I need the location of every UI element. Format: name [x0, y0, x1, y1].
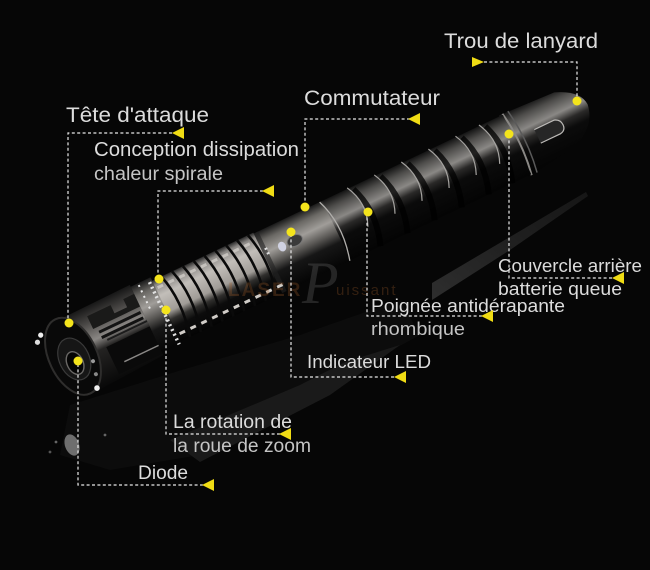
- callout: Indicateur LED: [286, 228, 431, 383]
- callout: Poignée antidérapante rhombique: Poignée antidérapante: [371, 296, 565, 316]
- callout: Indicateur LED: Indicateur LED: [307, 352, 431, 372]
- callout: Commutateur: Commutateur: [304, 87, 440, 110]
- callout: Conception dissipation chaleur spirale: [94, 139, 299, 284]
- callout: Couvercle arrière batterie queue: [498, 130, 642, 299]
- watermark: uissant: [336, 282, 398, 299]
- zoom wheel: [131, 277, 182, 353]
- reflection of the laser: [49, 192, 588, 470]
- callout: Commutateur: [300, 87, 440, 212]
- rhombic anti-slip grip: [319, 114, 531, 262]
- watermark: P: [301, 250, 339, 316]
- callout: Diode: Diode: [138, 463, 188, 484]
- callout: Diode: [74, 356, 214, 491]
- spiral heat dissipation fins: [150, 231, 286, 342]
- switch section: [254, 199, 354, 293]
- callout: Poignée antidérapante rhombique: rhombique: [371, 319, 465, 339]
- callout: La rotation de la roue de zoom: [162, 306, 311, 457]
- callout: Poignée antidérapante rhombique: [364, 208, 565, 339]
- callout: Trou de lanyard: [444, 30, 598, 106]
- laser body: [30, 73, 608, 407]
- callout: Tête d'attaque: Tête d'attaque: [66, 104, 209, 127]
- callout: La rotation de la roue de zoom: la roue de zoom: [173, 436, 311, 457]
- callout: Conception dissipation chaleur spirale: Conception dissipation: [94, 139, 299, 161]
- callout: Trou de lanyard: Trou de lanyard: [444, 30, 598, 53]
- callout: Couvercle arrière batterie queue: Couvercle arrière: [498, 256, 642, 276]
- watermark: [228, 250, 398, 316]
- tail cap with lanyard hole: [499, 79, 605, 177]
- callout: Couvercle arrière batterie queue: batterie queue: [498, 279, 622, 299]
- callout: Tête d'attaque: [64, 104, 209, 328]
- watermark: LASER: [228, 280, 302, 301]
- attack head: [30, 284, 165, 407]
- callout: La rotation de la roue de zoom: La rotation de: [173, 412, 292, 433]
- callout: Conception dissipation chaleur spirale: chaleur spirale: [94, 164, 223, 185]
